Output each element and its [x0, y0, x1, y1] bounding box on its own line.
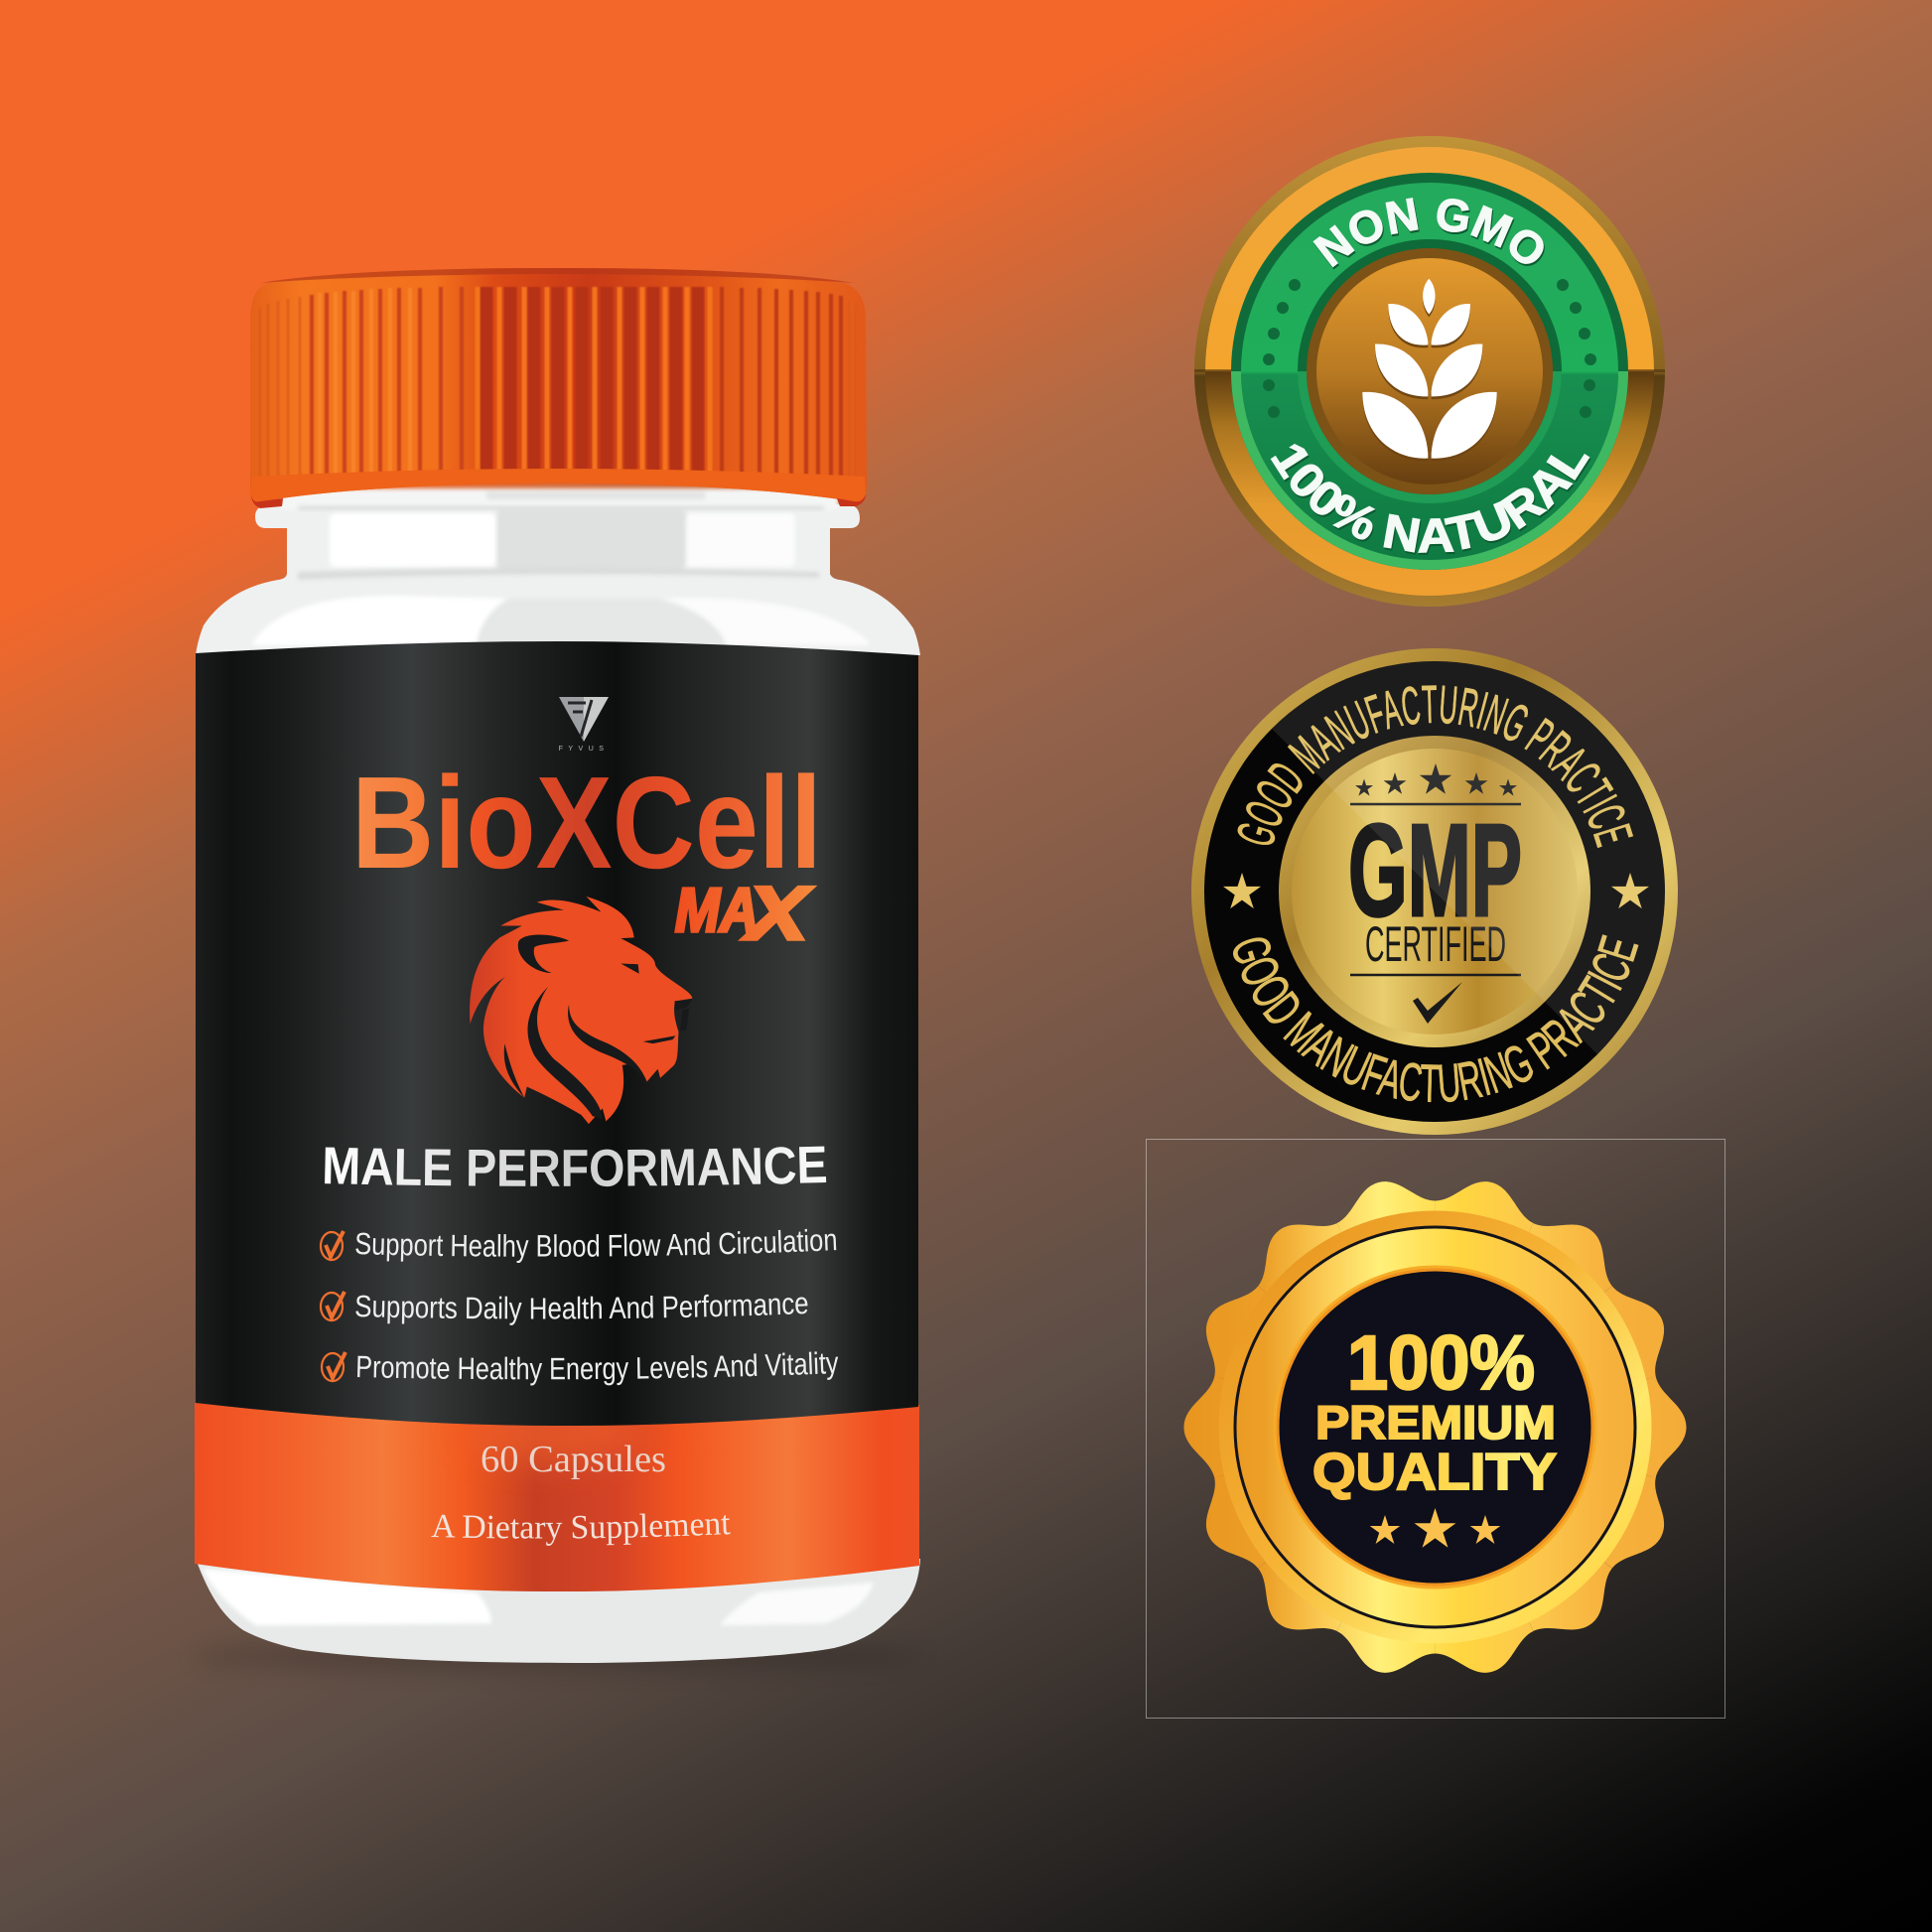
ring stars — [1223, 873, 1649, 908]
curved text top: GOOD MANUFACTURING PRACTICE — [1237, 685, 1634, 848]
GMP wordmark: GMP — [1348, 797, 1522, 943]
outer orange ring — [1194, 136, 1665, 607]
gold inner disk — [1279, 736, 1590, 1047]
navy core — [1279, 1271, 1590, 1583]
scalloped seal — [1183, 1181, 1686, 1673]
orange label band — [195, 1396, 919, 1591]
badge: GMP certified — [1191, 648, 1678, 1135]
badge: 100% premium quality — [1146, 1140, 1725, 1718]
brand title BioXCell: BioXCell — [351, 750, 822, 896]
capsule count: 60 Capsules — [481, 1439, 666, 1480]
brand logo FYVUS — [559, 697, 609, 753]
icon: check circle — [321, 1231, 344, 1260]
brown core — [1307, 248, 1553, 494]
curved text bottom: GOOD MANUFACTURING PRACTICE — [1233, 934, 1638, 1102]
CERTIFIED: CERTIFIED — [1365, 916, 1506, 972]
gold rim — [1191, 648, 1678, 1135]
diagonal sheen — [1272, 661, 1665, 1054]
curved text 100% NATURAL: 100% NATURAL — [1271, 444, 1590, 555]
QUALITY: QUALITY — [1312, 1444, 1557, 1501]
heading MALE PERFORMANCE: MALE PERFORMANCE — [325, 1146, 826, 1187]
rating stars — [1355, 763, 1517, 796]
badge: Non GMO — [1194, 136, 1665, 607]
frame — [1146, 1140, 1725, 1718]
product bottle — [195, 268, 920, 1672]
brand logo FYVUS: FYVUS — [559, 746, 609, 753]
seal ring — [1219, 1211, 1652, 1644]
icon: check mark — [1413, 982, 1462, 1024]
orange ribbed cap — [250, 268, 867, 508]
curved text NON GMO: NON GMO — [1312, 198, 1545, 270]
PREMIUM: PREMIUM — [1315, 1396, 1556, 1449]
icon: lion head — [470, 897, 692, 1124]
icon: check circle — [322, 1352, 345, 1381]
black label panel — [196, 641, 918, 1426]
benefit 3: Promote Healthy Energy Levels And Vitality — [357, 1351, 838, 1386]
bottle lower white base — [196, 1559, 920, 1663]
sub brand MAX: X — [742, 872, 813, 956]
bottle floor shadow — [190, 1642, 924, 1670]
icon: check circle — [321, 1292, 345, 1320]
supplement note: A Dietary Supplement — [431, 1513, 731, 1546]
icon: wheat leaves — [1362, 279, 1497, 459]
stars — [1370, 1508, 1500, 1548]
green band — [1231, 173, 1628, 570]
benefit 1: Support Healhy Blood Flow And Circulation — [355, 1229, 836, 1263]
100%: 100% — [1347, 1320, 1535, 1406]
sub brand MAX: MA — [675, 877, 759, 945]
black ring — [1204, 661, 1665, 1122]
benefit 2: Supports Daily Health And Performance — [355, 1295, 808, 1325]
band dots — [1263, 279, 1596, 418]
bottle neck and shoulder — [196, 488, 920, 655]
